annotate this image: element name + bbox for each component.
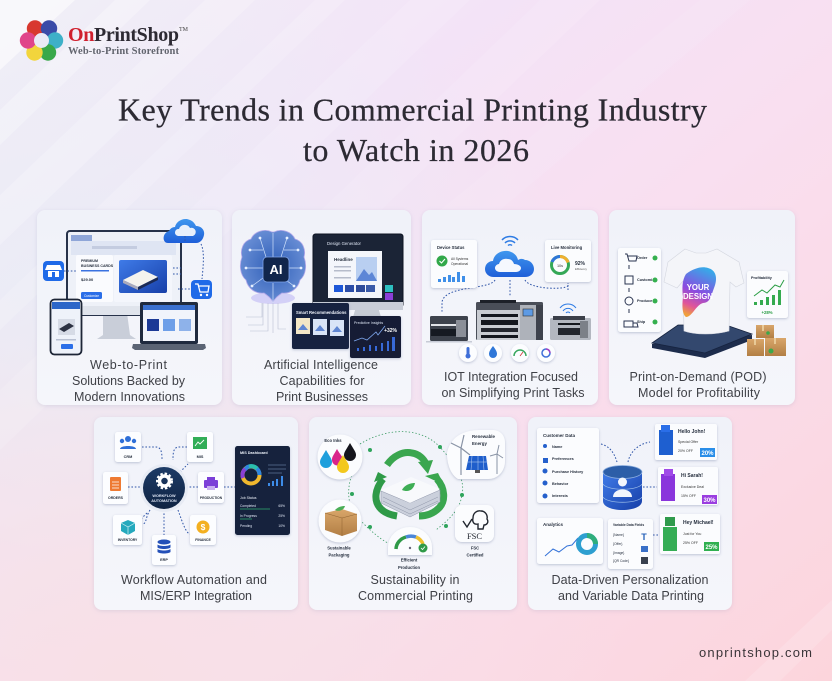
analytics card: Analytics xyxy=(543,522,564,527)
MIS dashboard: Pending xyxy=(240,524,252,528)
t-shirt: DESIGN xyxy=(683,292,713,301)
caption xyxy=(442,370,584,400)
caption: Web-to-Print xyxy=(90,358,168,372)
finance tile xyxy=(190,515,216,545)
monitor: $29.00 xyxy=(81,277,94,282)
variable data fields card: {Image} xyxy=(613,551,625,555)
order steps list: Customize xyxy=(637,278,656,282)
efficient production gauge xyxy=(388,527,432,555)
orders tile: ORDERS xyxy=(108,496,124,500)
caption: Artificial Intelligence xyxy=(264,358,378,372)
finance tile: FINANCE xyxy=(195,538,211,542)
design generator monitor xyxy=(313,234,403,317)
caption: Sustainability in xyxy=(370,573,460,587)
production tile: PRODUCTION xyxy=(200,496,223,500)
live monitoring card: Live Monitoring xyxy=(551,245,583,250)
smart recommendations panel: Smart Recommendations xyxy=(296,310,347,315)
customer data card: Behavior xyxy=(552,482,569,486)
live monitoring card: 92% xyxy=(575,261,586,267)
CRM tile xyxy=(115,432,141,462)
variable data fields card: Variable Data Fields xyxy=(613,523,644,527)
eco inks circle xyxy=(318,434,362,480)
cardboard boxes xyxy=(747,325,786,356)
ERP tile: ERP xyxy=(160,558,168,562)
caption xyxy=(552,573,709,603)
MIS dashboard: Job Status xyxy=(240,496,257,500)
sensor icons xyxy=(459,344,555,362)
centre hub: workflow automation: AUTOMATION xyxy=(151,499,177,503)
panel: IOT integration xyxy=(422,210,598,405)
variable data fields card: {QR Code} xyxy=(613,559,630,563)
caption: Data-Driven Personalization xyxy=(552,573,709,587)
title: to Watch in 2026 xyxy=(303,132,529,168)
database icon xyxy=(603,466,642,510)
design generator monitor: Design Generator xyxy=(327,241,361,246)
caption: Commercial Printing xyxy=(358,589,473,603)
personalized card: Michael: Hey Michael! xyxy=(683,520,714,526)
renewable energy tile xyxy=(447,430,505,479)
icon: recycle with paper stack xyxy=(374,453,444,517)
inventory tile: INVENTORY xyxy=(118,538,138,542)
dotted eco ring xyxy=(349,432,464,544)
caption: on Simplifying Print Tasks xyxy=(442,386,584,400)
laptop xyxy=(132,302,206,350)
panel: workflow automation xyxy=(94,417,298,610)
device status card: Device Status xyxy=(437,245,465,250)
caption: and Variable Data Printing xyxy=(558,589,704,603)
smart recommendations panel xyxy=(292,303,349,349)
t-shirt xyxy=(664,249,744,334)
logo xyxy=(20,20,189,61)
left printer xyxy=(426,316,472,342)
MIS dashboard: 65% xyxy=(278,504,285,508)
efficient production label: Efficient xyxy=(401,558,418,562)
panel: print on demand xyxy=(609,210,795,405)
personalized card: Sarah: 30% xyxy=(703,498,716,504)
website url: onprintshop.com xyxy=(699,645,812,660)
caption: MIS/ERP Integration xyxy=(140,589,252,603)
MIS dashboard: In Progress xyxy=(240,514,257,518)
logo tagline: Web-to-Print Storefront xyxy=(68,46,180,57)
personalized card: John: 20% OFF xyxy=(678,449,693,453)
FSC label: Certified xyxy=(466,552,484,558)
variable data fields card xyxy=(608,519,653,569)
caption xyxy=(358,573,473,603)
predictive insights panel: Predictive Insights xyxy=(354,321,383,325)
personalized card: John: Hello John! xyxy=(678,429,706,435)
icon: AI brain xyxy=(240,230,306,333)
FSC certified tile: FSC xyxy=(467,531,482,541)
icon: cloud xyxy=(164,219,204,279)
caption xyxy=(72,358,186,404)
customer data card: Purchase History xyxy=(552,470,584,474)
efficient production label: Production xyxy=(398,565,420,570)
personalized card: Sarah: Hi Sarah! xyxy=(681,473,703,479)
sustainable packaging circle xyxy=(318,500,362,542)
caption xyxy=(121,573,267,603)
monitor: BUSINESS CARDS xyxy=(81,264,114,268)
centre printer xyxy=(476,300,543,340)
personalized card: Michael: 25% OFF xyxy=(683,541,698,545)
order steps list: Order xyxy=(637,256,648,260)
predictive insights panel: +32% xyxy=(384,328,398,334)
order steps list xyxy=(618,248,661,332)
device status card: All Systems xyxy=(451,257,469,261)
connector lines xyxy=(128,447,235,535)
monitor: PREMIUM xyxy=(81,259,98,263)
icon: AI brain: AI xyxy=(270,262,282,277)
panel: data-driven personalization xyxy=(528,417,732,610)
caption: Capabilities for xyxy=(280,374,364,388)
renewable energy tile: Renewable xyxy=(472,434,495,439)
icon: shopping cart xyxy=(173,268,212,299)
design generator monitor: Headline xyxy=(334,257,353,262)
customer data card xyxy=(537,428,599,503)
FSC label: FSC xyxy=(471,546,479,550)
order steps list: Ship xyxy=(637,320,646,324)
panel: sustainability xyxy=(309,417,517,610)
customer data card: Interests xyxy=(552,494,568,498)
connection lines xyxy=(442,280,568,312)
monitor xyxy=(67,231,181,339)
MIS dashboard: 25% xyxy=(278,514,285,518)
ERP tile xyxy=(152,535,176,565)
caption: IOT Integration Focused xyxy=(444,370,578,384)
title: Key Trends in Commercial Printing Industry xyxy=(118,92,707,128)
finance tile: $ xyxy=(201,522,206,532)
personalized card: John: Special Offer xyxy=(678,440,699,444)
profitability card: +28% xyxy=(761,310,773,315)
panel: artificial intelligence xyxy=(232,210,411,405)
FSC certified tile xyxy=(455,505,494,542)
MIS tile: MIS xyxy=(197,455,204,459)
device status card xyxy=(431,240,477,288)
panel: web-to-print solutions xyxy=(37,210,222,405)
customer data card: Customer Data xyxy=(543,433,576,438)
caption xyxy=(630,370,766,400)
printing platform xyxy=(652,325,752,358)
variable data fields card: T xyxy=(641,532,647,542)
packaging label: Packaging xyxy=(329,552,350,558)
production tile xyxy=(198,472,224,503)
MIS dashboard: MIS Dashboard xyxy=(240,451,268,455)
FSC label xyxy=(466,546,484,558)
icon: wifi xyxy=(502,237,518,246)
MIS dashboard xyxy=(235,446,290,535)
caption xyxy=(264,358,378,404)
personalized card: John xyxy=(655,424,717,460)
variable data fields card: {Offer} xyxy=(613,542,623,546)
renewable energy tile: Energy xyxy=(472,441,487,446)
efficient production label xyxy=(398,558,420,570)
icon: cloud xyxy=(485,251,534,277)
MIS dashboard: Completed xyxy=(240,504,256,508)
caption: Model for Profitability xyxy=(638,386,761,400)
profitability card xyxy=(747,271,788,318)
customer data card: Name xyxy=(552,445,562,449)
caption: Workflow Automation and xyxy=(121,573,267,587)
predictive insights panel xyxy=(350,316,401,358)
orders tile xyxy=(103,472,128,504)
CRM tile: CRM xyxy=(124,455,132,459)
caption: Print Businesses xyxy=(276,390,368,404)
t-shirt: YOUR xyxy=(687,283,710,292)
personalized card: Michael: Just for You xyxy=(683,532,701,536)
live monitoring card: Efficiency xyxy=(575,267,588,271)
right printer xyxy=(550,304,591,340)
inventory tile xyxy=(113,515,142,545)
analytics card xyxy=(537,518,603,564)
MIS tile xyxy=(187,432,213,462)
personalized card: Sarah xyxy=(658,467,718,505)
live monitoring card xyxy=(545,240,591,282)
personalized card: Michael: 25% xyxy=(705,545,718,551)
title xyxy=(118,92,707,168)
centre hub: workflow automation xyxy=(140,464,188,512)
personalized card: Sarah: Exclusive Deal xyxy=(681,485,704,489)
personalized card: Sarah: 15% OFF xyxy=(681,494,696,498)
device status card: Operational xyxy=(451,262,468,266)
profitability card: Profitability xyxy=(751,276,773,280)
trademark: TM xyxy=(179,27,189,33)
packaging label xyxy=(327,546,351,558)
personalized card: Michael xyxy=(660,514,720,554)
variable data fields card: {Name} xyxy=(613,533,625,537)
caption: Solutions Backed by xyxy=(72,374,186,388)
logo mark: colour petals xyxy=(20,20,63,61)
order steps list: Produce xyxy=(637,299,652,303)
customer data card: Preferences xyxy=(552,457,574,461)
caption: Print-on-Demand (POD) xyxy=(630,370,766,384)
icon: storefront xyxy=(43,261,76,281)
caption: Modern Innovations xyxy=(74,390,185,404)
MIS dashboard: 10% xyxy=(278,524,285,528)
centre hub: workflow automation: WORKFLOW xyxy=(152,494,176,498)
live monitoring card: 10s xyxy=(557,264,563,268)
eco inks circle: Eco Inks xyxy=(324,438,342,443)
monitor: Customize xyxy=(84,294,99,298)
logo wordmark: OnPrintShop xyxy=(68,24,179,46)
connector lines xyxy=(601,442,659,535)
packaging label: Sustainable xyxy=(327,546,351,550)
phone xyxy=(50,300,82,354)
personalized card: John: 20% xyxy=(701,451,714,457)
